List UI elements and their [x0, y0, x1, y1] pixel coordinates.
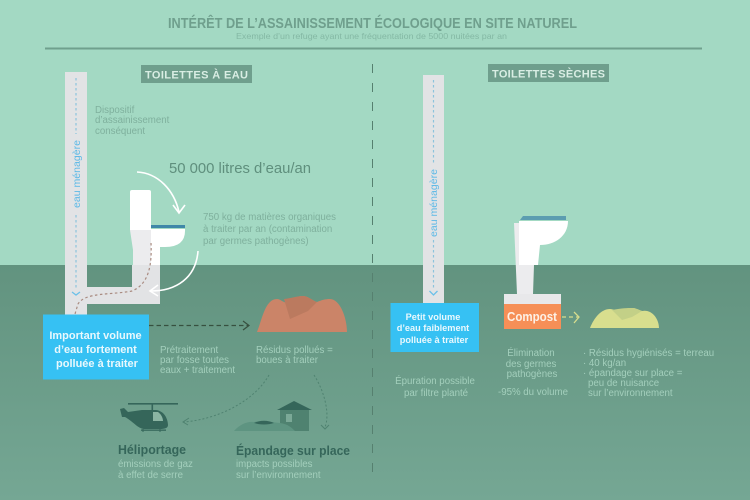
- callout: important volume: polluée à traiter: [56, 358, 139, 370]
- heading: toilettes sèches: [488, 64, 609, 82]
- text: matières organiques: par germes pathogènes): [203, 236, 309, 247]
- heading: toilettes à eau: [141, 65, 252, 83]
- text: élimination: pathogènes: [507, 369, 557, 380]
- callout: petit volume: Petit volume: [406, 312, 460, 322]
- text: matières organiques: 750 kg de matières organiques: [203, 212, 336, 223]
- text: résidus hygiénisés: · épandage sur place =: [583, 368, 683, 379]
- water pipe: right: eau ménagère: [429, 169, 440, 237]
- callout: petit volume: d’eau faiblement: [397, 323, 469, 333]
- icon: dry toilet: Compost: [507, 310, 558, 324]
- callout: important volume: d’eau fortement: [54, 344, 137, 356]
- arrow: compost to heap: [562, 312, 579, 323]
- icon: dry toilet: [504, 216, 568, 329]
- title: INTÉRÊT DE L’ASSAINISSEMENT ÉCOLOGIQUE EN SITE NATUREL: [168, 14, 577, 32]
- subtitle: Exemple d’un refuge ayant une fréquentation de 5000 nuitées par an: [236, 32, 507, 41]
- text: héliportage: émissions de gaz: [118, 459, 193, 470]
- text: résidus hygiénisés: · Résidus hygiénisés = terreau: [583, 348, 714, 359]
- text: résidus hygiénisés: peu de nuisance: [588, 378, 659, 389]
- icon: house and heap: [234, 401, 312, 431]
- text: dispositif: conséquent: [95, 126, 145, 137]
- text: épandage: sur l’environnement: [236, 470, 321, 481]
- panel: toilettes sèches: [390, 75, 714, 399]
- callout: petit volume: [390, 303, 479, 352]
- icon: helicopter: [120, 403, 178, 432]
- text: élimination: Élimination: [507, 348, 555, 359]
- callout: important volume: [43, 314, 149, 380]
- text: élimination: -95% du volume: [498, 387, 568, 398]
- text: héliportage: Héliportage: [118, 443, 186, 457]
- text: épuration: Épuration possible: [395, 376, 475, 387]
- text: épandage: Épandage sur place: [236, 443, 350, 458]
- background: sky: [0, 0, 750, 265]
- water pipe: left: [65, 72, 160, 316]
- arrow: water in: [137, 172, 185, 213]
- text: résidus hygiénisés: sur l’environnement: [588, 388, 673, 399]
- background: ground: [0, 265, 750, 500]
- icon: red heap: [257, 296, 347, 332]
- text: dispositif: d’assainissement: [95, 115, 170, 126]
- water pipe: right: [423, 75, 444, 304]
- callout: important volume: Important volume: [49, 330, 142, 342]
- text: épandage: [236, 443, 350, 481]
- dashed path: sewage: [75, 243, 151, 314]
- text: héliportage: à effet de serre: [118, 470, 183, 481]
- text: 50 000 litres: 50 000 litres d’eau/an: [169, 160, 311, 177]
- text: épuration: par filtre planté: [404, 388, 468, 399]
- panel: toilettes à eau: [43, 72, 350, 481]
- text: dispositif: Dispositif: [95, 105, 135, 116]
- text: épandage: impacts possibles: [236, 459, 313, 470]
- text: résidus pollués: boues à traiter: [256, 355, 319, 366]
- arrow: to spreading: [314, 375, 329, 429]
- text: prétraitement: par fosse toutes: [160, 355, 229, 366]
- heading: toilettes sèches: TOILETTES SÈCHES: [492, 68, 605, 80]
- text: résidus pollués: Résidus pollués =: [256, 345, 333, 356]
- water pipe: left: eau ménagère: [72, 140, 83, 208]
- arrow: water out: [150, 251, 198, 296]
- text: héliportage: [118, 443, 193, 481]
- heading: toilettes à eau: TOILETTES À EAU: [145, 68, 248, 82]
- callout: petit volume: polluée à traiter: [400, 335, 469, 345]
- text: matières organiques: à traiter par an (contamination: [203, 224, 332, 235]
- icon: flush toilet: [130, 190, 185, 287]
- icon: yellow heap: [590, 308, 659, 328]
- text: prétraitement: eaux + traitement: [160, 365, 235, 376]
- text: élimination: des germes: [506, 359, 556, 370]
- text: prétraitement: Prétraitement: [160, 345, 218, 356]
- arrow: to residues: [149, 321, 249, 330]
- text: résidus hygiénisés: · 40 kg/an: [583, 358, 626, 369]
- arrow: to helicopter: [183, 375, 269, 425]
